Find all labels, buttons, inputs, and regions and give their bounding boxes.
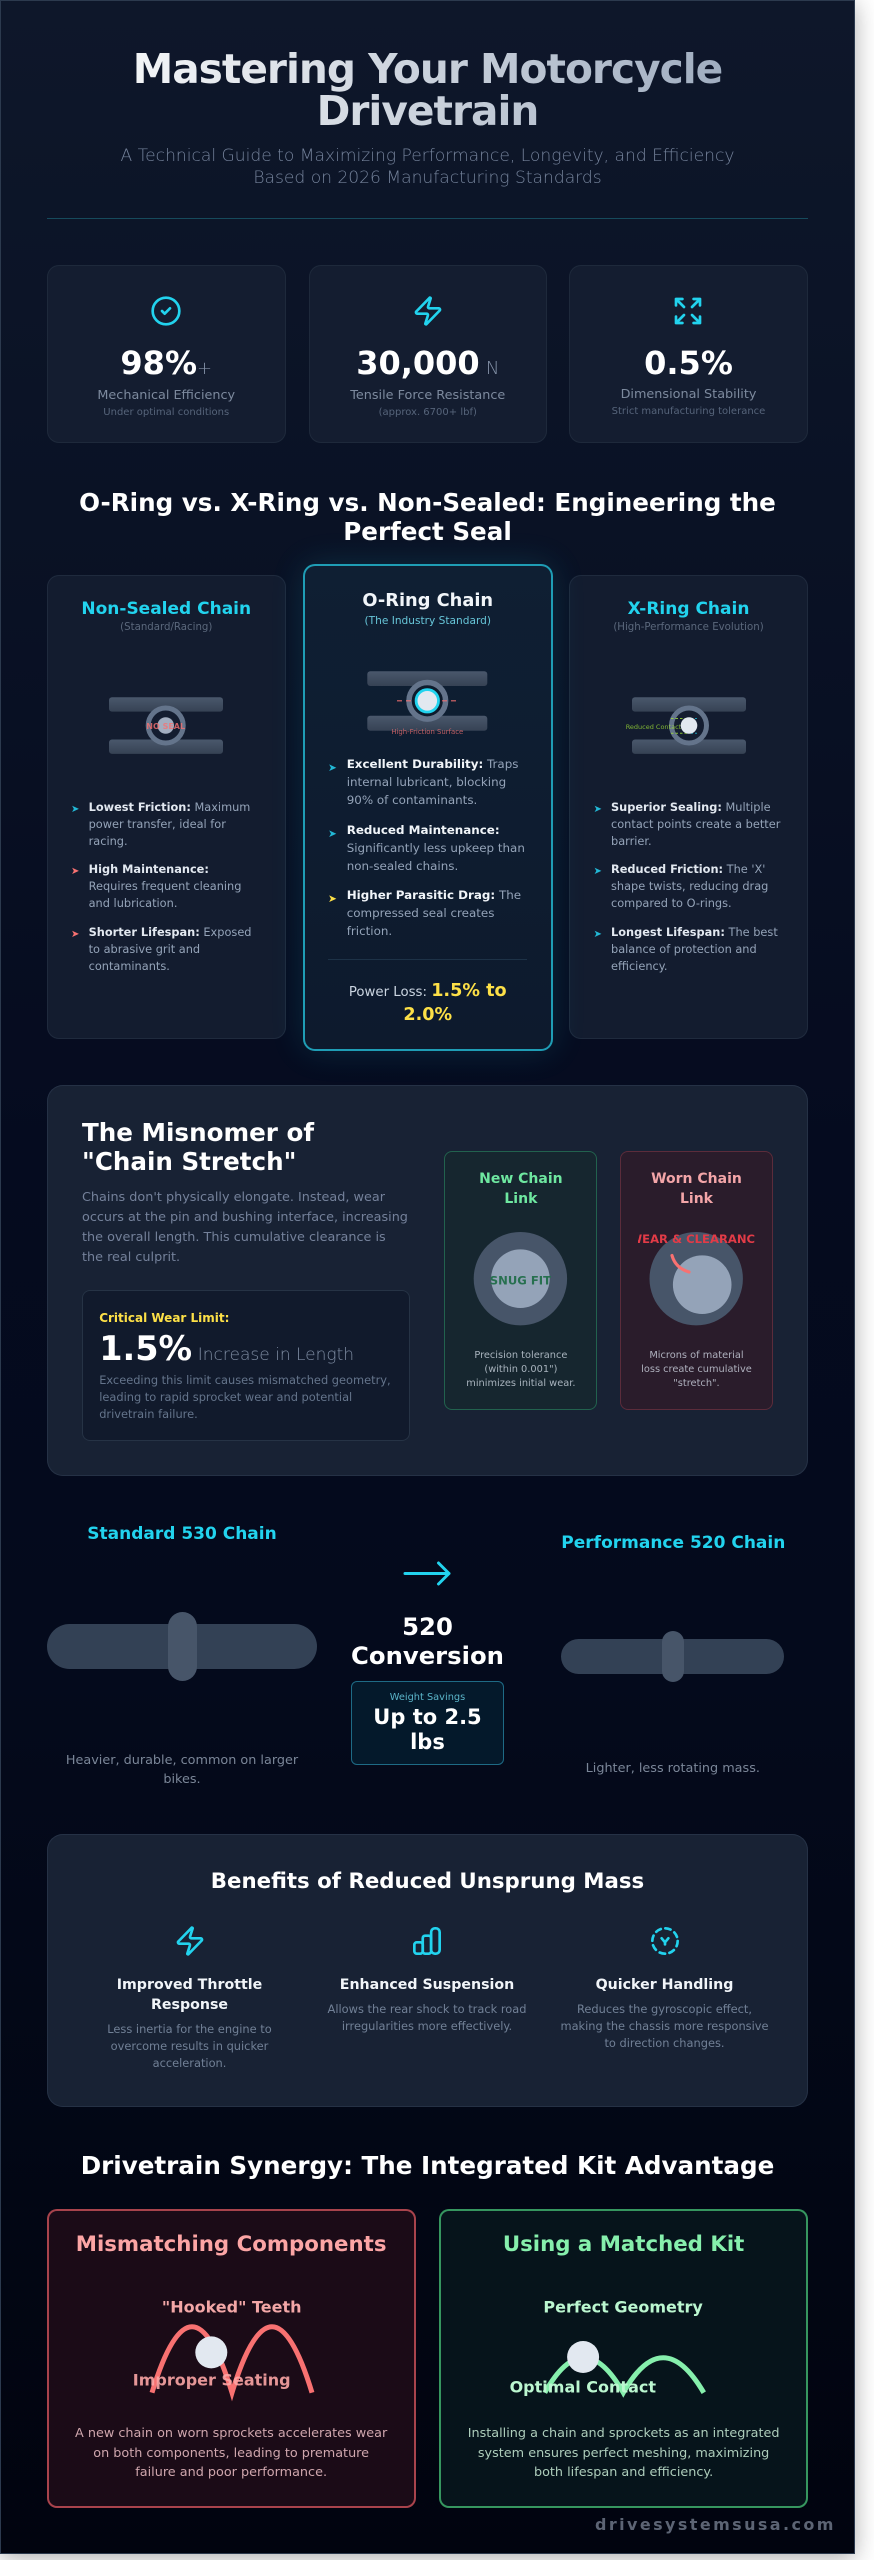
benefit: throttle response	[67, 1919, 312, 2079]
list item: higher parasitic drag: compressed seal creates	[347, 906, 494, 920]
link description: minimizes initial wear.	[466, 1378, 575, 1389]
panel description: on both components, leading to premature	[93, 2446, 369, 2461]
card subtitle: (High-Performance Evolution)	[613, 622, 764, 633]
panel description: A new chain on worn sprockets accelerates wear	[75, 2426, 387, 2441]
card title: Non-Sealed Chain	[81, 598, 251, 618]
list item: longest lifespan: balance of protection and	[611, 942, 757, 956]
list item: high maintenance: Requires frequent cleaning	[89, 879, 241, 893]
paragraph	[82, 1190, 408, 1265]
power loss: 2.0%	[403, 1005, 452, 1025]
bullet list	[71, 800, 252, 972]
callout description	[99, 1372, 391, 1420]
benefit description: making the chassis more responsive	[560, 2018, 769, 2032]
icon: expand	[674, 298, 702, 324]
list item: shorter lifespan: to abrasive grit and	[89, 942, 200, 956]
paragraph: Chains don't physically elongate. Instead, wear	[82, 1190, 385, 1205]
benefit description	[304, 2000, 550, 2034]
heading: The Misnomer of	[82, 1118, 314, 1147]
link title	[479, 1171, 563, 1207]
paragraph: the overall length. This cumulative clearance is	[82, 1230, 386, 1245]
list item: reduced maintenance: Significantly less upkeep than	[347, 840, 525, 854]
link title: Worn Chain	[651, 1171, 742, 1187]
diagram: o-ring: High-Friction Surface	[391, 728, 463, 736]
diagram: hooked teeth: "Hooked" Teeth	[162, 2298, 302, 2317]
list item: reduced friction: ➤	[594, 866, 602, 877]
diagram: x-ring	[626, 697, 746, 754]
callout description: Exceeding this limit causes mismatched geometry,	[99, 1372, 391, 1386]
diagram: no seal	[109, 697, 223, 754]
conversion: center summary	[351, 1561, 504, 1765]
list item: shorter lifespan: Shorter Lifespan: Exposed	[89, 924, 252, 938]
list item: lowest friction: Lowest Friction: Maximum	[89, 800, 250, 814]
panel description: failure and poor performance.	[135, 2465, 327, 2480]
list item: shorter lifespan	[71, 924, 252, 972]
benefit title: Enhanced Suspension	[340, 1977, 514, 1993]
list item: excellent durability: ➤	[328, 762, 337, 774]
title	[47, 48, 808, 132]
panel: benefits of reduced unsprung mass	[47, 1834, 808, 2107]
value: 0.5%: 0.5%	[644, 344, 733, 382]
diagram: hooked teeth	[67, 2289, 395, 2414]
benefit title	[67, 1975, 312, 2015]
heading: "Chain Stretch"	[82, 1147, 296, 1176]
label: Dimensional Stability	[621, 387, 756, 402]
link description: Precision tolerance	[474, 1350, 567, 1361]
callout label: Weight Savings	[390, 1692, 465, 1703]
benefit title: Improved Throttle	[117, 1977, 262, 1993]
title: Drivetrain	[317, 87, 538, 135]
list item: reduced maintenance	[328, 822, 525, 872]
diagram: snug fit: SNUG FIT	[490, 1274, 551, 1288]
panel description: both lifespan and efficiency.	[534, 2465, 713, 2480]
heading: seal comparison: Perfect Seal	[343, 517, 512, 546]
diagram: x-ring: Reduced Contact	[626, 723, 682, 731]
heading: Benefits of Reduced Unsprung Mass	[211, 1869, 644, 1894]
power loss	[349, 980, 507, 1025]
chain description	[66, 1752, 298, 1787]
card title: O-Ring Chain	[362, 590, 493, 611]
panel description: system ensures perfect meshing, maximizing	[478, 2446, 769, 2461]
list item: higher parasitic drag: friction.	[347, 924, 392, 938]
list item: lowest friction	[71, 800, 250, 848]
conversion title: Conversion	[351, 1641, 504, 1670]
list item: superior sealing: Superior Sealing: Multiple	[611, 800, 771, 814]
benefit description	[542, 2000, 787, 2052]
icon: arrow right	[404, 1561, 451, 1586]
panel: chain stretch misnomer	[47, 1085, 808, 1476]
stat card: tensile force	[308, 265, 547, 443]
callout value	[373, 1705, 482, 1754]
conversion: performance 520 chain	[561, 1530, 784, 1780]
list item: high maintenance: ➤	[71, 866, 79, 877]
watermark: drivesystemsusa.com	[595, 2514, 836, 2534]
list item: excellent durability: Excellent Durability: Traps	[347, 756, 518, 770]
list item: excellent durability: 90% of contaminants.	[347, 792, 477, 806]
list item: lowest friction: ➤	[71, 804, 79, 814]
list item: reduced maintenance: ➤	[328, 828, 337, 840]
list item: reduced maintenance: Reduced Maintenance:	[347, 822, 500, 836]
callout value: Up to 2.5	[373, 1705, 482, 1729]
link title: Link	[680, 1191, 713, 1207]
list item: excellent durability	[328, 756, 518, 806]
conversion title: 520	[402, 1612, 453, 1641]
panel: non-sealed chain	[47, 574, 286, 1039]
list item: superior sealing: ➤	[594, 804, 602, 814]
chain title: Performance 520 Chain	[561, 1533, 785, 1553]
stat card: dimensional stability	[569, 265, 808, 443]
list item: excellent durability: internal lubricant, blocking	[347, 774, 506, 788]
icon: dashed handling circle	[648, 1925, 680, 1957]
value: 30,000 N: 30,000 N	[356, 344, 499, 382]
card title: X-Ring Chain	[628, 598, 749, 618]
panel title: Using a Matched Kit	[503, 2232, 744, 2257]
power loss: Power Loss: 1.5% to	[349, 980, 507, 1000]
benefit title: Quicker Handling	[596, 1977, 733, 1993]
subtitle	[120, 146, 734, 188]
list item: shorter lifespan: contaminants.	[89, 958, 170, 972]
benefit description: Less inertia for the engine to	[107, 2022, 272, 2036]
callout label: Critical Wear Limit:	[99, 1311, 229, 1325]
list item: longest lifespan: ➤	[594, 928, 602, 940]
paragraph: the real culprit.	[82, 1250, 180, 1265]
panel description	[47, 2424, 415, 2483]
heading: seal comparison	[79, 488, 776, 546]
benefit: handling	[542, 1919, 787, 2079]
panel description	[439, 2424, 808, 2483]
bullet list	[328, 756, 525, 938]
list item: shorter lifespan: ➤	[71, 928, 79, 940]
chain bar	[561, 1639, 784, 1674]
conversion title	[351, 1612, 504, 1670]
heading	[82, 1118, 314, 1176]
list item: superior sealing: contact points create a better	[611, 816, 780, 830]
chain bar	[47, 1624, 317, 1669]
chain plate	[168, 1612, 197, 1681]
list item: reduced friction: shape twists, reducing drag	[611, 879, 768, 893]
diagram: perfect geometry	[459, 2289, 787, 2414]
benefit: suspension	[304, 1919, 550, 2079]
callout: weight savings	[351, 1681, 504, 1765]
sublabel: Under optimal conditions	[103, 407, 229, 418]
link title: New Chain	[479, 1171, 563, 1187]
diagram: snug fit	[474, 1232, 568, 1326]
benefit description: Allows the rear shock to track road	[328, 2002, 526, 2016]
chain description: bikes.	[163, 1772, 201, 1787]
benefit description: Reduces the gyroscopic effect,	[577, 2002, 752, 2016]
callout value: 1.5% Increase in Length	[99, 1329, 354, 1368]
chain title: Standard 530 Chain	[87, 1524, 277, 1544]
label: Tensile Force Resistance	[350, 388, 505, 403]
link title: Link	[504, 1191, 537, 1207]
value: 98%+: 98%+	[120, 344, 212, 382]
panel: new chain link	[444, 1151, 597, 1410]
subtitle: A Technical Guide to Maximizing Performance, Longevity, and Efficiency	[120, 146, 734, 166]
benefit description: acceleration.	[153, 2056, 226, 2070]
benefit title: Response	[151, 1997, 228, 2013]
list item: reduced friction	[594, 862, 768, 910]
callout description: leading to rapid sprocket wear and potential	[99, 1390, 352, 1404]
header	[47, 45, 808, 219]
link description	[641, 1350, 752, 1389]
chain description: Heavier, durable, common on larger	[66, 1752, 298, 1768]
list item: higher parasitic drag: Higher Parasitic Drag: The	[347, 888, 521, 902]
benefit description: to direction changes.	[604, 2036, 725, 2050]
icon: zap	[414, 296, 442, 326]
list item: lowest friction: racing.	[89, 834, 128, 848]
list item: superior sealing: barrier.	[611, 834, 652, 848]
list item: superior sealing	[594, 800, 780, 848]
list item: lowest friction: power transfer, ideal for	[89, 816, 226, 830]
list item: higher parasitic drag: ➤	[328, 893, 337, 905]
icon: zap	[174, 1925, 206, 1957]
diagram: wear and clearance	[638, 1232, 755, 1326]
chain description: Lighter, less rotating mass.	[586, 1761, 760, 1776]
link description: (within 0.001")	[484, 1364, 557, 1375]
panel: o-ring chain (featured)	[303, 564, 552, 1050]
panel title: Mismatching Components	[76, 2232, 387, 2257]
benefit description: overcome results in quicker	[111, 2038, 268, 2052]
sublabel: Strict manufacturing tolerance	[612, 406, 765, 417]
panel: matched kit	[439, 2209, 808, 2508]
diagram: perfect geometry: Perfect Geometry	[544, 2298, 704, 2317]
list item: high maintenance: High Maintenance:	[89, 862, 209, 876]
callout description: drivetrain failure.	[99, 1406, 198, 1420]
diagram: hooked teeth: Improper Seating	[133, 2371, 291, 2390]
list item: longest lifespan: Longest Lifespan: The best	[611, 924, 778, 938]
list item: high maintenance: and lubrication.	[89, 896, 177, 910]
panel: mismatching components	[47, 2209, 416, 2508]
link description	[466, 1350, 575, 1389]
label: Mechanical Efficiency	[97, 388, 235, 403]
bullet list	[594, 800, 780, 972]
link description: loss create cumulative	[641, 1364, 752, 1375]
list item: high maintenance	[71, 862, 241, 910]
list item: reduced maintenance: non-sealed chains.	[347, 858, 458, 872]
paragraph: occurs at the pin and bushing interface, increasing	[82, 1210, 408, 1225]
diagram: no seal: NO SEAL	[146, 722, 185, 731]
icon: circle check	[151, 296, 181, 326]
list item: longest lifespan	[594, 924, 778, 972]
benefit description: irregularities more effectively.	[342, 2018, 512, 2032]
diagram: perfect geometry: Optimal Contact	[510, 2378, 657, 2397]
link title	[651, 1171, 742, 1207]
callout: critical wear limit	[82, 1290, 410, 1441]
list item: reduced friction: Reduced Friction: The 'X'	[611, 862, 765, 876]
list item: longest lifespan: efficiency.	[611, 958, 667, 972]
sublabel: (approx. 6700+ lbf)	[379, 407, 477, 418]
stat card: mechanical efficiency	[47, 265, 286, 443]
link description: "stretch".	[673, 1378, 720, 1389]
heading: seal comparison: O-Ring vs. X-Ring vs. Non-Sealed: Engineering the	[79, 488, 776, 517]
link description: Microns of material	[649, 1350, 744, 1361]
chain plate	[662, 1631, 684, 1682]
benefit description	[67, 2020, 312, 2072]
list item: reduced friction: compared to O-rings.	[611, 896, 732, 910]
diagram: o-ring	[367, 671, 488, 736]
panel: worn chain link	[620, 1151, 773, 1410]
panel description: Installing a chain and sprockets as an integrated	[468, 2426, 779, 2441]
heading: drivetrain synergy: Drivetrain Synergy: The Integrated Kit Advantage	[81, 2151, 774, 2180]
conversion: standard 530 chain	[47, 1524, 317, 1787]
list item: higher parasitic drag	[328, 888, 521, 938]
panel: x-ring chain	[569, 574, 808, 1039]
title: Mastering Your Motorcycle	[133, 45, 722, 93]
icon: bar chart	[411, 1925, 443, 1957]
subtitle: Based on 2026 Manufacturing Standards	[253, 168, 602, 188]
card subtitle: (The Industry Standard)	[364, 614, 491, 626]
callout value: lbs	[410, 1730, 445, 1754]
card subtitle: (Standard/Racing)	[120, 622, 212, 633]
